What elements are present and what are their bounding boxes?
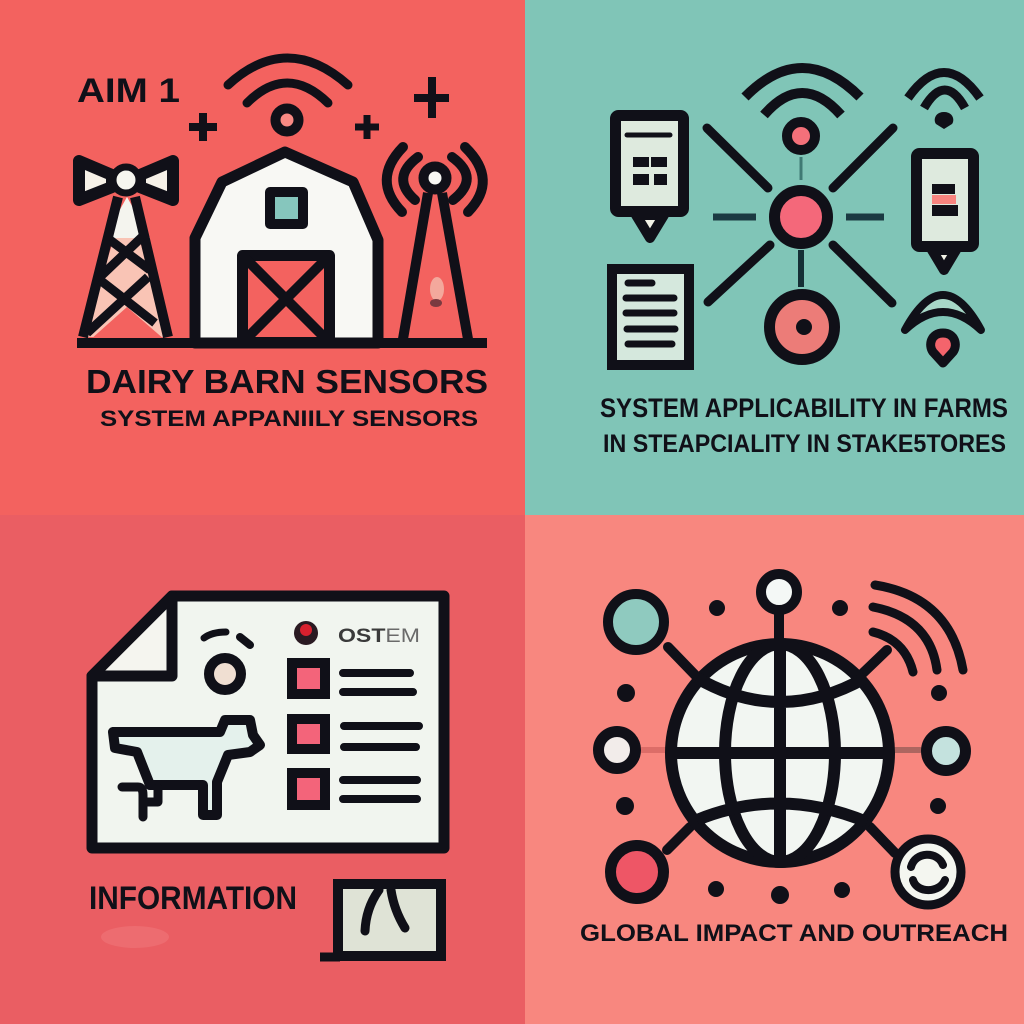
icon: globe (671, 644, 889, 862)
icon: wifi arcs (873, 585, 963, 672)
icon: plus signs (189, 77, 449, 141)
heading: information: INFORMATION (89, 880, 297, 916)
icon: cow (113, 720, 260, 817)
checklist (292, 663, 419, 805)
icon: small wifi signal (908, 72, 980, 129)
icon: barn (195, 152, 378, 343)
icon: top wifi signal (745, 68, 860, 150)
ground line (77, 338, 487, 348)
icon: dots (616, 600, 947, 904)
icon: bottom node (770, 294, 834, 360)
icon: antenna tower (387, 147, 483, 339)
panel: system applicability (525, 0, 1024, 515)
antenna smudge (430, 277, 444, 307)
heading: dairy barn sensors: DAIRY BARN SENSORS (86, 363, 488, 400)
icon: red node (610, 846, 664, 898)
icon: central hub (707, 128, 893, 303)
checklist row 3 (292, 773, 417, 805)
icon: red dot with label (294, 621, 420, 647)
icon: top node (761, 574, 797, 610)
panel: information (0, 515, 525, 1024)
icon: teal node (608, 594, 664, 650)
document sheet (92, 596, 444, 848)
icon: small chart card (320, 884, 441, 957)
icon: left node (598, 732, 636, 768)
icon: document (612, 269, 689, 365)
icon: right document tag (916, 154, 974, 270)
icon: windmill tower (79, 161, 173, 340)
icon: top wifi signal (228, 58, 348, 132)
icon: sensor eye (204, 632, 250, 690)
icon: right node (926, 732, 966, 770)
faded text smudge (101, 926, 169, 948)
icon: left document tag (616, 116, 684, 238)
panel: aim 1 dairy barn sensors (0, 0, 525, 515)
checklist row 2 (292, 719, 419, 749)
icon: red dot with label: OST EM (338, 626, 420, 647)
heading: aim 1: AIM 1 (77, 72, 180, 110)
panel: global impact (525, 515, 1024, 1024)
subheading: stakeholders line: IN STEAPCIALITY IN STAKE5TORES (603, 430, 1006, 458)
icon: copyright badge (895, 839, 961, 905)
heading: global impact and outreach: GLOBAL IMPACT AND OUTREACH (580, 920, 1008, 947)
checklist row 1 (292, 663, 413, 694)
icon: pin with wifi (905, 295, 981, 363)
subheading: system sensors: SYSTEM APPANIILY SENSORS (100, 406, 478, 431)
icon: network links (642, 612, 920, 853)
